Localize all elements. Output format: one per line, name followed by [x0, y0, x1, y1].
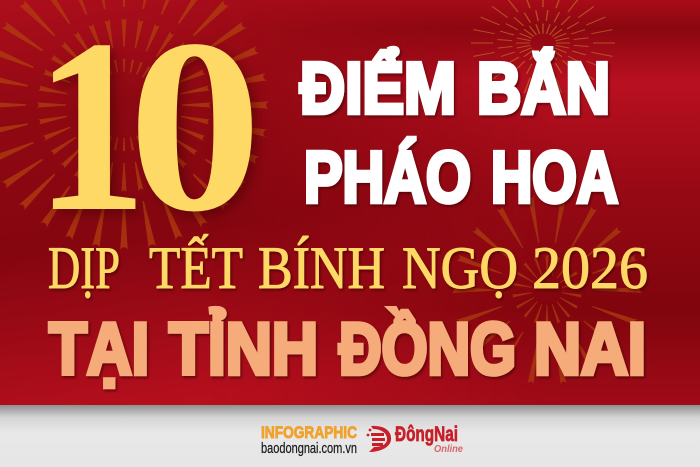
- subheading: DỊP TẾT BÍNH NGỌ 2026: NGỌ: [402, 235, 518, 301]
- subheading: TẠI TỈNH ĐỒNG NAI: TỈNH: [169, 309, 318, 390]
- subheading: DỊP TẾT BÍNH NGỌ 2026: [48, 235, 648, 301]
- heading line: PHÁO HOA: [304, 138, 618, 218]
- heading line: ĐIỂM BẮN: ĐIỂM: [300, 48, 456, 129]
- heading number 10: [35, 0, 262, 263]
- icon: firework burst lower right: [420, 194, 647, 405]
- logo tagline: Online: Online: [434, 444, 463, 455]
- icon: firework burst top right: [435, 0, 633, 125]
- heading line: PHÁO HOA: HOA: [491, 138, 618, 218]
- icon: newspaper logo mark: [367, 426, 391, 452]
- subheading: DỊP TẾT BÍNH NGỌ 2026: 2026: [532, 235, 648, 301]
- subheading: TẠI TỈNH ĐỒNG NAI: NAI: [534, 309, 646, 390]
- subheading: TẠI TỈNH ĐỒNG NAI: [49, 309, 646, 390]
- subheading: DỊP TẾT BÍNH NGỌ 2026: BÍNH: [258, 235, 385, 301]
- logo wordmark: ĐôngNai: ĐôngNai: [395, 423, 458, 446]
- subheading: TẠI TỈNH ĐỒNG NAI: ĐỒNG: [339, 309, 516, 390]
- subheading: TẠI TỈNH ĐỒNG NAI: TẠI: [49, 309, 149, 390]
- heading line: PHÁO HOA: PHÁO: [304, 138, 471, 218]
- heading line: ĐIỂM BẮN: BẮN: [477, 48, 610, 129]
- panel: footer strip: [0, 405, 700, 467]
- subheading: DỊP TẾT BÍNH NGỌ 2026: DỊP: [48, 235, 120, 301]
- subheading: DỊP TẾT BÍNH NGỌ 2026: TẾT: [149, 235, 243, 301]
- heading line: ĐIỂM BẮN: [300, 48, 610, 129]
- footer url: baodongnai.com.vn: [261, 440, 357, 457]
- icon: firework burst left: [0, 0, 288, 269]
- footer label: INFOGRAPHIC: INFOGRAPHIC: [261, 423, 357, 442]
